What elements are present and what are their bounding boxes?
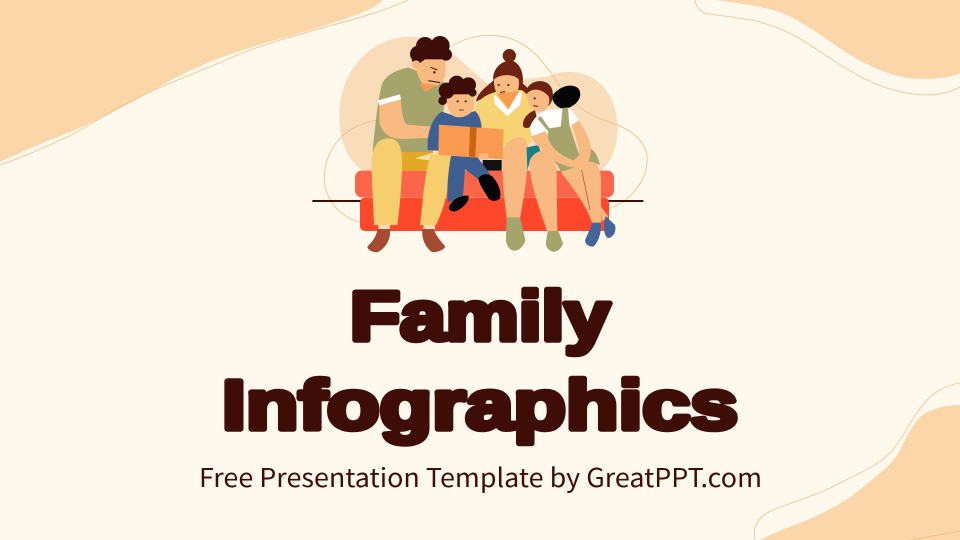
son (428, 76, 500, 212)
title: Infographics (222, 366, 738, 444)
father's curly hair (410, 36, 452, 65)
title: Family (350, 277, 610, 355)
open book (438, 125, 504, 159)
father (367, 36, 452, 252)
mother (474, 49, 563, 252)
top-right corner wave (695, 0, 960, 95)
floor line (312, 200, 643, 202)
title (222, 277, 738, 444)
overalls (537, 107, 600, 173)
background blob (339, 37, 617, 172)
sofa (355, 171, 614, 231)
subtitle: Free Presentation Template by GreatPPT.com (199, 458, 762, 495)
top-left corner wave (0, 0, 408, 165)
son's curly hair (438, 76, 477, 105)
bottom-right corner wave (754, 383, 960, 540)
thin outline loop (324, 35, 647, 223)
illustration: family on a sofa (312, 35, 647, 252)
daughter (523, 81, 615, 247)
